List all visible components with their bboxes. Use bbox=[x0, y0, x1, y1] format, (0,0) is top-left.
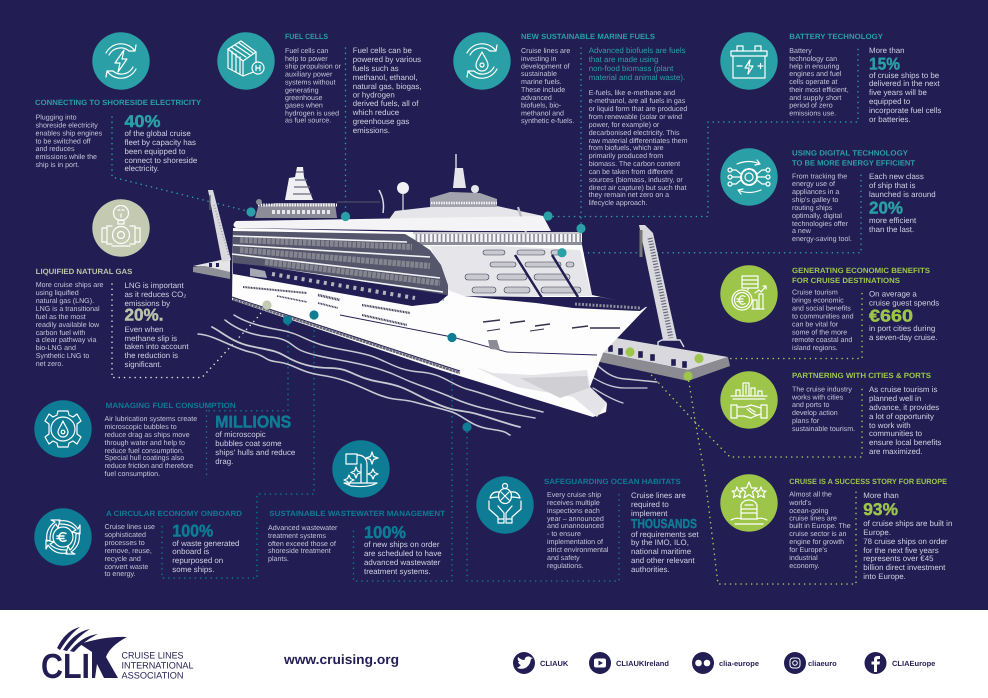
body text: island regions. bbox=[792, 344, 838, 352]
side text: powered by various bbox=[353, 55, 421, 64]
body text: plans for bbox=[792, 417, 820, 425]
stat lead: of ship that is bbox=[869, 181, 916, 190]
stat 40%: 40% bbox=[124, 112, 160, 131]
stat text: connect to shoreside bbox=[124, 156, 198, 165]
stat text: national maritime bbox=[631, 547, 692, 556]
stat text: to work with bbox=[869, 421, 911, 430]
stat 93%: 93% bbox=[863, 500, 898, 519]
body text: From tracking the bbox=[792, 173, 847, 181]
side text: methanol, ethanol, bbox=[353, 73, 418, 82]
body text: development of bbox=[521, 62, 570, 70]
body text: Synthetic LNG to bbox=[36, 352, 89, 360]
highlighted text: material and animal waste). bbox=[589, 73, 685, 82]
right crane and dock bbox=[600, 225, 730, 381]
stat lead: Each new class bbox=[869, 172, 924, 181]
body text: their most efficient, bbox=[789, 86, 849, 94]
stat text lower: significant. bbox=[124, 360, 162, 369]
logo ship mark forming the letter A bbox=[80, 637, 127, 678]
panel: wastewater management bbox=[268, 440, 445, 576]
body text: cruise sector is an bbox=[789, 530, 847, 538]
body text: hydrogen is used bbox=[285, 109, 339, 117]
body text: implementation of bbox=[547, 538, 603, 546]
body text: and ports to bbox=[792, 401, 830, 409]
body text: Plugging into bbox=[36, 114, 77, 122]
body text: processes to bbox=[104, 539, 145, 547]
stat lead: More than bbox=[869, 46, 905, 55]
stat text: of requirements set bbox=[631, 530, 699, 539]
website: www.cruising.org bbox=[283, 652, 399, 667]
stat text lower: methane slip is bbox=[124, 334, 177, 343]
body text: technology can bbox=[789, 55, 837, 63]
body text: strict environmental bbox=[547, 546, 609, 554]
body text: cruise lines are bbox=[789, 515, 837, 523]
body text: a new bbox=[792, 227, 812, 235]
body text: industrial bbox=[789, 554, 818, 562]
social: flickr: clia-europe bbox=[719, 659, 759, 668]
panel: new sustainable marine fuels bbox=[453, 32, 688, 207]
body text: built in Europe. The bbox=[789, 522, 851, 530]
body text: economy. bbox=[789, 562, 820, 570]
side text: derived fuels, all of bbox=[353, 99, 419, 108]
body text: biofuels, bio- bbox=[521, 102, 562, 110]
side text: emissions. bbox=[353, 126, 390, 135]
body text: More cruise ships are bbox=[36, 281, 104, 289]
social: flickr bbox=[692, 652, 759, 674]
body text: develop action bbox=[792, 409, 838, 417]
body text: Cruise tourism bbox=[792, 289, 838, 297]
heading: USING DIGITAL TECHNOLOGY bbox=[792, 148, 908, 158]
heading: SUSTAINABLE WASTEWATER MANAGEMENT bbox=[269, 509, 445, 518]
body text: and unannounced bbox=[547, 522, 604, 530]
panel: fuel cells bbox=[217, 32, 422, 135]
body text: to be switched off bbox=[36, 138, 91, 146]
lifeboats and hull windows bbox=[233, 287, 460, 373]
stat text: than the last. bbox=[869, 225, 914, 234]
body text: a clear pathway via bbox=[36, 336, 96, 344]
body text: optimally, digital bbox=[792, 212, 842, 220]
social: twitter bbox=[513, 652, 569, 674]
stat 20%: 20%. bbox=[124, 306, 164, 325]
stat text: and other relevant bbox=[631, 556, 695, 565]
top deck bar bbox=[234, 216, 551, 231]
panel: managing fuel consumption bbox=[34, 400, 296, 478]
stat text: onboard is bbox=[172, 547, 209, 556]
body text: fuel consumption. bbox=[104, 470, 160, 478]
waves bbox=[198, 315, 657, 435]
body text: gases when bbox=[285, 102, 323, 110]
stat text: into Europe. bbox=[863, 572, 906, 581]
side text: Fuel cells can be bbox=[353, 46, 413, 55]
body text: technologies offer bbox=[792, 220, 849, 228]
body text: to energy. bbox=[104, 570, 136, 578]
icon: fuel drop cycle bbox=[453, 32, 511, 90]
body text: brings economic bbox=[792, 297, 844, 305]
icon: digital gear network bbox=[720, 148, 778, 206]
body text: Advanced wastewater bbox=[268, 524, 338, 532]
logo swoosh bbox=[57, 627, 98, 652]
stat text: of waste generated bbox=[172, 539, 239, 548]
body text: and safety bbox=[547, 554, 580, 562]
stat text: As cruise tourism is bbox=[869, 385, 937, 394]
body text: - to ensure bbox=[547, 530, 581, 538]
social: instagram: cliaeuro bbox=[808, 659, 837, 668]
left crane and dock bbox=[193, 190, 231, 279]
stat lead: On average a bbox=[869, 289, 917, 298]
connector lines bbox=[112, 48, 862, 584]
body text: fuel as the most bbox=[36, 313, 86, 321]
stat text lower: Even when bbox=[124, 325, 164, 334]
e-fuels text: sources (biomass, industry, or bbox=[589, 176, 683, 184]
body text: and supply short bbox=[789, 94, 841, 102]
side text: natural gas, biogas, bbox=[353, 82, 422, 91]
panel: success story for Europe bbox=[720, 474, 952, 581]
body text: regulations. bbox=[547, 562, 584, 570]
stat text: Europe. bbox=[863, 528, 891, 537]
e-fuels text: biomass. The carbon content bbox=[589, 160, 680, 168]
stat THOUSANDS: THOUSANDS bbox=[631, 516, 697, 531]
body text: and reduces bbox=[36, 145, 75, 153]
body text: net zero. bbox=[36, 360, 63, 368]
body text: world's bbox=[788, 499, 812, 507]
upper decks bbox=[255, 154, 543, 232]
body text: ocean-going bbox=[789, 507, 828, 515]
stat text: advance, it provides bbox=[869, 403, 939, 412]
stat lead: implement bbox=[631, 509, 668, 518]
body text: plants. bbox=[268, 555, 289, 563]
body text: emissions while the bbox=[36, 153, 97, 161]
body text: Cruise lines use bbox=[104, 523, 155, 531]
body text: marine fuels. bbox=[521, 78, 562, 86]
heading: MANAGING FUEL CONSUMPTION bbox=[106, 401, 236, 410]
body text: engine for growth bbox=[789, 538, 844, 546]
e-fuels text: power, for example) or bbox=[589, 121, 660, 129]
icon: euro coin and chart bbox=[720, 265, 778, 323]
stat text lower: the reduction is bbox=[124, 351, 178, 360]
body text: period of zero bbox=[789, 102, 833, 110]
icon: city and handshake bbox=[720, 371, 778, 429]
e-fuels text: they remain net zero on a bbox=[589, 191, 669, 199]
stat text: of cruise ships to be bbox=[869, 71, 940, 80]
icon: turtle and hands bbox=[476, 476, 534, 534]
body text: auxiliary power bbox=[285, 70, 333, 78]
stat text: communities to bbox=[869, 429, 923, 438]
stat text upper: as it reduces CO₂ bbox=[124, 290, 186, 299]
body text: Cruise lines are bbox=[521, 47, 570, 55]
body text: and social benefits bbox=[792, 305, 851, 313]
stat text: drag. bbox=[215, 457, 233, 466]
body text: year – announced bbox=[547, 515, 604, 523]
e-fuels text: primarily produced from bbox=[589, 152, 663, 160]
body text: help to power bbox=[285, 55, 328, 63]
body text: investing in bbox=[521, 55, 557, 63]
body text: help in ensuring bbox=[789, 62, 839, 70]
body text: sustainable tourism. bbox=[792, 425, 855, 433]
stat text: incorporate fuel cells bbox=[869, 106, 941, 115]
body text: Fuel cells can bbox=[285, 47, 328, 55]
stat text: of the global cruise bbox=[124, 129, 191, 138]
stat text upper: LNG is important bbox=[124, 281, 185, 290]
stat text: ensure local benefits bbox=[869, 438, 941, 447]
stat text upper: emissions by bbox=[124, 299, 170, 308]
icon: clean water pipe bbox=[332, 440, 390, 498]
body text: generating bbox=[285, 86, 319, 94]
body text: receives multiple bbox=[547, 499, 600, 507]
stat text: fleet by capacity has bbox=[124, 138, 196, 147]
bow staterooms bbox=[465, 250, 581, 298]
stat text: of cruise ships are built in bbox=[863, 519, 952, 528]
stat text: more efficient bbox=[869, 216, 917, 225]
body text: Air lubrication systems create bbox=[104, 415, 197, 423]
body text: Battery bbox=[789, 47, 812, 55]
stat text: represents over €45 bbox=[863, 554, 934, 563]
icon: plug power cycle bbox=[92, 32, 150, 90]
logo name: INTERNATIONAL bbox=[122, 660, 194, 670]
body text: microscopic bubbles to bbox=[104, 423, 177, 431]
body text: as fuel source. bbox=[285, 117, 331, 125]
panel: economic benefits bbox=[720, 265, 939, 352]
stat text: 78 cruise ships on order bbox=[863, 537, 948, 546]
side text: greenhouse gas bbox=[353, 117, 409, 126]
stat text: five years will be bbox=[869, 88, 927, 97]
stat 100%: 100% bbox=[172, 522, 213, 541]
icon: gas valve bbox=[92, 199, 150, 257]
footer band bbox=[0, 610, 988, 698]
side text: or hydrogen bbox=[353, 90, 395, 99]
body text: remove, reuse, bbox=[104, 547, 152, 555]
social: twitter: CLIAUK bbox=[540, 659, 569, 668]
stat text: authorities. bbox=[631, 565, 670, 574]
side text: fuels such as bbox=[353, 64, 399, 73]
body text: remote coastal and bbox=[792, 336, 852, 344]
heading: NEW SUSTAINABLE MARINE FUELS bbox=[521, 32, 655, 41]
panel: liquified natural gas bbox=[36, 199, 189, 369]
social: facebook: CLIAEurope bbox=[892, 659, 935, 668]
stat lead: More than bbox=[863, 491, 899, 500]
body text: enables ship engines bbox=[36, 130, 103, 138]
panel: shoreside electricity bbox=[35, 32, 201, 173]
bow rail bbox=[464, 296, 647, 350]
logo name: ASSOCIATION bbox=[122, 670, 184, 680]
body text: some of the more bbox=[792, 329, 847, 337]
body text: readily available low bbox=[36, 321, 100, 329]
body text: greenhouse bbox=[285, 94, 323, 102]
body text: sophisticated bbox=[104, 531, 146, 539]
stat text: or batteries. bbox=[869, 115, 911, 124]
panel: cities and ports bbox=[720, 371, 941, 456]
e-fuels text: or liquid form that are produced bbox=[589, 105, 687, 113]
stat text: ships' hulls and reduce bbox=[215, 448, 296, 457]
hull shading bbox=[232, 246, 607, 417]
heading: FUEL CELLS bbox=[285, 32, 328, 41]
stat text: electricity. bbox=[124, 164, 159, 173]
e-fuels text: e-methanol, are all fuels in gas bbox=[589, 97, 686, 105]
footer logo: CLIA bbox=[41, 627, 194, 686]
stat text: planned well in bbox=[869, 394, 921, 403]
body text: The cruise industry bbox=[792, 386, 852, 394]
stat text: equipped to bbox=[869, 97, 911, 106]
body text: reduce friction and therefore bbox=[104, 462, 193, 470]
body text: synthetic e-fuels. bbox=[521, 117, 574, 125]
body text: ship's galley to bbox=[792, 196, 838, 204]
body text: ship propulsion or bbox=[285, 62, 342, 70]
body text: often exceed those of bbox=[268, 540, 336, 548]
e-fuels text: from biofuels, which are bbox=[589, 144, 664, 152]
panel: circular economy bbox=[34, 508, 243, 578]
social: facebook bbox=[864, 652, 935, 674]
stat 20%: 20% bbox=[869, 199, 903, 218]
heading: PARTNERING WITH CITIES & PORTS bbox=[792, 371, 931, 380]
body text: sustainable bbox=[521, 70, 557, 78]
e-fuels text: decarbonised electricity. This bbox=[589, 129, 680, 137]
body text: cells operate at bbox=[789, 78, 837, 86]
body text: routing ships bbox=[792, 204, 833, 212]
body text: convert waste bbox=[104, 563, 148, 571]
stat text: delivered in the next bbox=[869, 79, 940, 88]
stat 100%: 100% bbox=[364, 523, 406, 542]
panel: digital technology bbox=[720, 148, 936, 243]
body text: for Europe's bbox=[789, 546, 828, 554]
stat lead: cruise guest spends bbox=[869, 298, 939, 307]
body text: recycle and bbox=[104, 555, 141, 563]
panel: battery technology bbox=[720, 32, 941, 124]
stat text: in port cities during bbox=[869, 324, 935, 333]
side text: which reduce bbox=[352, 108, 400, 117]
stat text: advanced wastewater bbox=[364, 558, 441, 567]
body text: through water and help to bbox=[104, 439, 185, 447]
stat lead: Cruise lines are bbox=[631, 491, 686, 500]
heading: CRUISE IS A SUCCESS STORY FOR EUROPE bbox=[789, 477, 947, 486]
body text: systems without bbox=[285, 78, 335, 86]
e-fuels text: lifecycle approach. bbox=[589, 199, 647, 207]
body text: inspections each bbox=[547, 507, 600, 515]
highlighted text: Advanced biofuels are fuels bbox=[589, 46, 686, 55]
stat 15%: 15% bbox=[869, 54, 900, 73]
e-fuels text: from renewable (solar or wind bbox=[589, 113, 682, 121]
location markers bbox=[246, 207, 704, 432]
social: youtube: CLIAUKIreland bbox=[616, 659, 669, 668]
body text: engines and fuel bbox=[789, 70, 842, 78]
body text: works with cities bbox=[791, 394, 844, 402]
body text: can be vital for bbox=[792, 321, 839, 329]
body text: shoreside electricity bbox=[36, 122, 98, 130]
highlighted text: that are made using bbox=[589, 55, 658, 64]
heading: GENERATING ECONOMIC BENEFITS bbox=[792, 266, 930, 275]
body text: emissions use. bbox=[789, 109, 836, 117]
body text: energy-saving tool. bbox=[792, 235, 852, 243]
body text: treatment systems bbox=[268, 532, 326, 540]
stat text: a seven-day cruise. bbox=[869, 333, 937, 342]
balcony band bbox=[413, 232, 582, 245]
logo name: CRUISE LINES bbox=[122, 650, 184, 660]
social: instagram bbox=[784, 652, 837, 674]
heading: A CIRCULAR ECONOMY ONBOARD bbox=[106, 509, 243, 518]
body text: methanol and bbox=[521, 109, 564, 117]
body text: Special hull coatings also bbox=[104, 454, 184, 462]
stat text: treatment systems. bbox=[364, 567, 431, 576]
heading: CONNECTING TO SHORESIDE ELECTRICITY bbox=[35, 98, 201, 107]
stat text: are maximized. bbox=[869, 447, 922, 456]
stat text: bubbles coat some bbox=[215, 439, 282, 448]
icon: battery bbox=[720, 32, 778, 90]
stat text: a lot of opportunity bbox=[869, 412, 934, 421]
heading: LIQUIFIED NATURAL GAS bbox=[36, 267, 132, 276]
promenade deck bbox=[233, 263, 448, 306]
highlighted text: non-food biomass (plant bbox=[589, 64, 674, 73]
panel: ocean habitats bbox=[476, 476, 699, 574]
icon: gear and drop bbox=[34, 400, 92, 458]
icon: hydrogen fuel cell bbox=[217, 32, 275, 90]
stat text: by the IMO, ILO, bbox=[631, 538, 689, 547]
logo letters: CLI bbox=[41, 647, 90, 686]
e-fuels text: raw material differentiates them bbox=[589, 137, 688, 145]
body text: These include bbox=[521, 86, 565, 94]
stateroom balconies bbox=[232, 231, 448, 298]
icon: euro recycling bbox=[34, 508, 92, 566]
stat lead: required to bbox=[631, 500, 669, 509]
body text: using liquified bbox=[36, 289, 79, 297]
body text: Almost all the bbox=[789, 491, 832, 499]
body text: bio-LNG and bbox=[36, 344, 76, 352]
body text: natural gas (LNG). bbox=[36, 297, 94, 305]
cruise ship illustration bbox=[193, 154, 730, 435]
stat text: of new ships on order bbox=[364, 540, 440, 549]
body text: appliances in a bbox=[792, 188, 839, 196]
e-fuels text: direct air capture) but such that bbox=[589, 184, 687, 192]
body text: reduce fuel consumption. bbox=[104, 447, 184, 455]
hull bbox=[232, 228, 647, 417]
heading: BATTERY TECHNOLOGY bbox=[789, 32, 883, 41]
stat MILLIONS: MILLIONS bbox=[215, 413, 291, 432]
stat text: repurposed on bbox=[172, 556, 223, 565]
stat text lower: taken into account bbox=[124, 342, 189, 351]
body text: to communities and bbox=[792, 313, 854, 321]
stat text: for the next five years bbox=[863, 546, 939, 555]
body text: reduce drag as ships move bbox=[104, 431, 190, 439]
stat text: of microscopic bbox=[215, 430, 266, 439]
body text: LNG is a transitional bbox=[36, 305, 100, 313]
stat text: are scheduled to have bbox=[364, 549, 442, 558]
stat €660: €660 bbox=[869, 307, 913, 326]
body text: advanced bbox=[521, 94, 552, 102]
stat lead: launched is around bbox=[869, 190, 936, 199]
stat text: some ships. bbox=[172, 565, 214, 574]
e-fuels text: E-fuels, like e-methane and bbox=[589, 89, 675, 97]
stat text: billion direct investment bbox=[863, 563, 946, 572]
e-fuels text: can be taken from different bbox=[589, 168, 673, 176]
body text: Every cruise ship bbox=[547, 491, 601, 499]
heading: SAFEGUARDING OCEAN HABITATS bbox=[544, 477, 681, 486]
heading: FOR CRUISE DESTINATIONS bbox=[792, 276, 900, 285]
body text: energy use of bbox=[792, 180, 835, 188]
heading: TO BE MORE ENERGY EFFICIENT bbox=[792, 158, 915, 168]
body text: shoreside treatment bbox=[268, 547, 331, 555]
icon: stars and ship bbox=[720, 474, 778, 532]
social: youtube bbox=[589, 652, 669, 674]
body text: ship is in port. bbox=[36, 161, 79, 169]
stat text: been equipped to bbox=[124, 147, 186, 156]
body text: carbon fuel with bbox=[36, 329, 85, 337]
